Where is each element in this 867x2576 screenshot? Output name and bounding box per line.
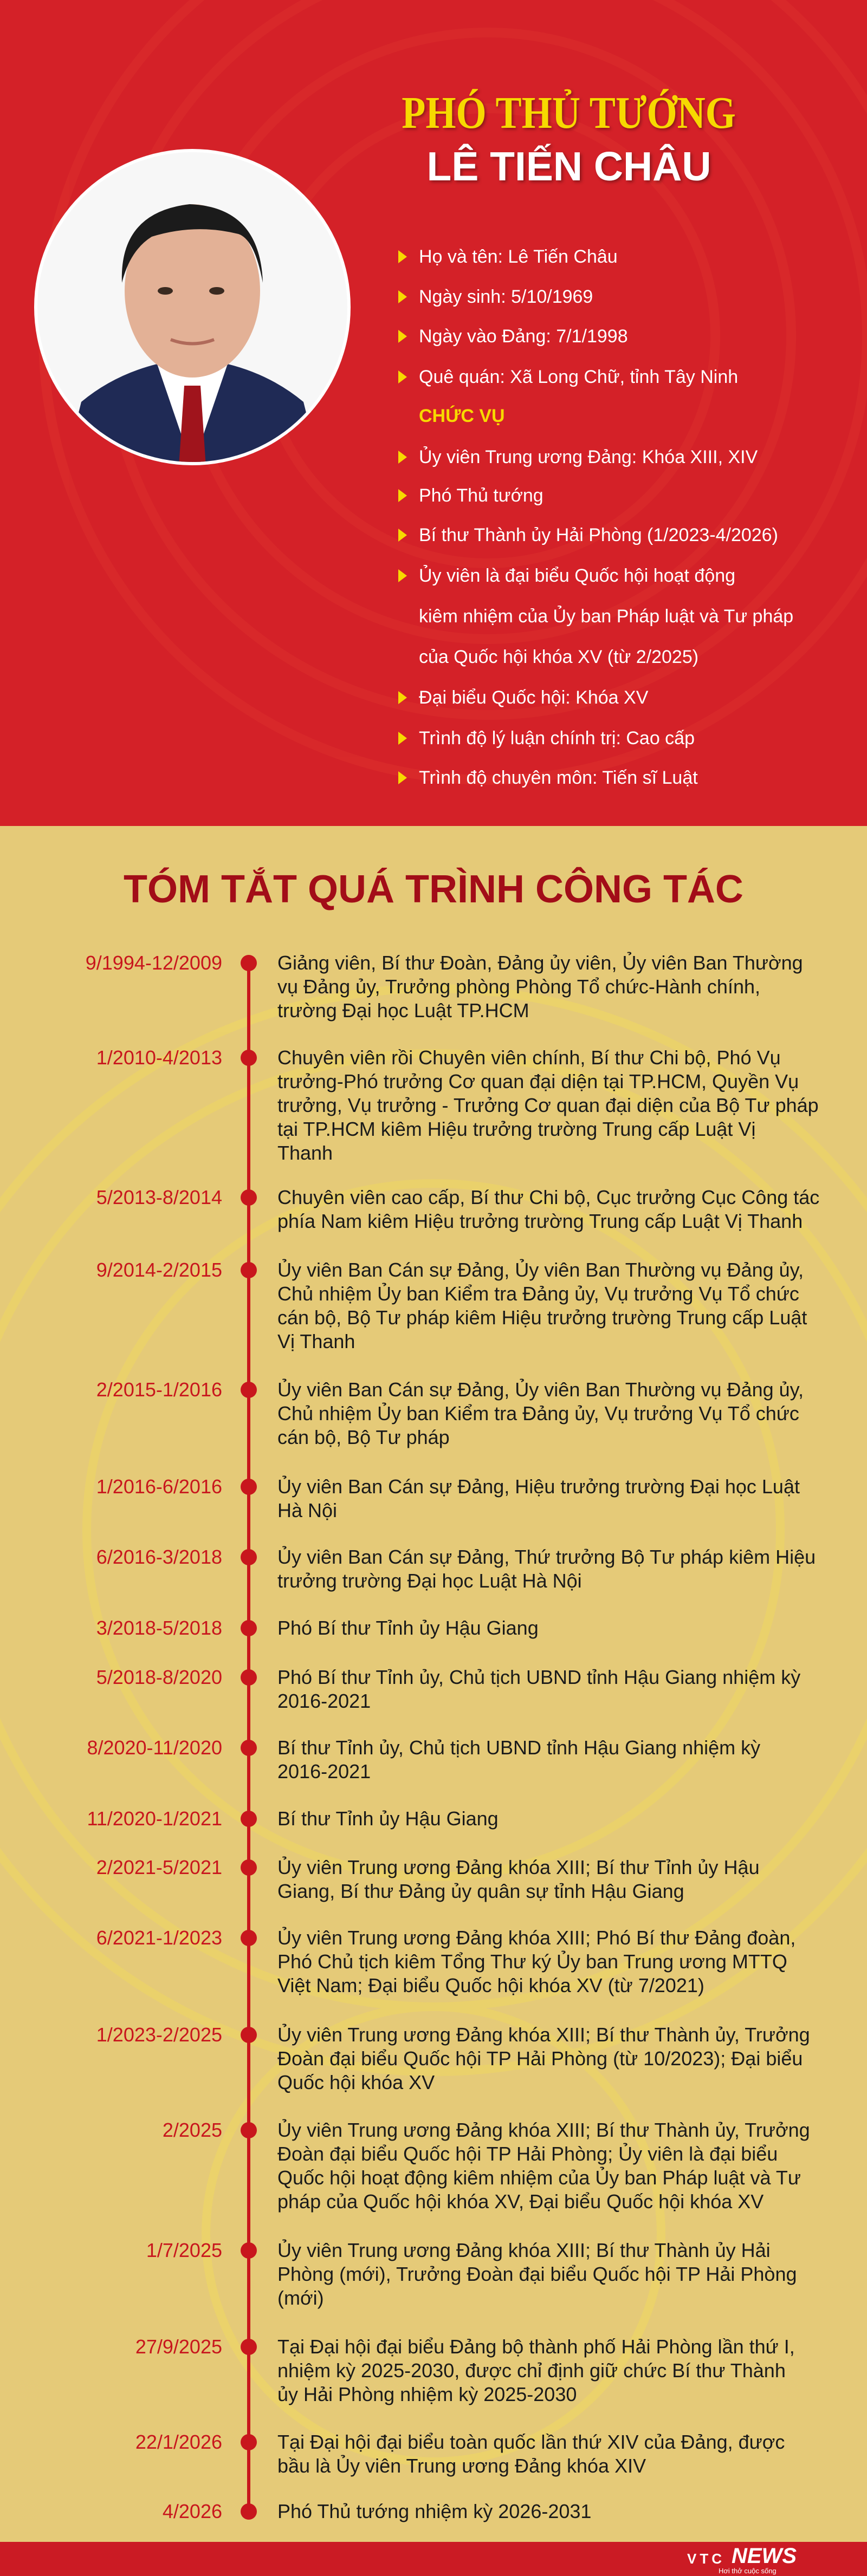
entry 14: Quốc hội khóa XV <box>277 2071 435 2093</box>
header panel: Họ và tên: Lê Tiến Châu <box>419 246 618 267</box>
entry 8: Phó Bí thư Tỉnh ủy Hậu Giang <box>277 1617 539 1639</box>
header panel: Ngày sinh: 5/10/1969 <box>419 287 593 307</box>
info: birthday <box>398 287 593 307</box>
entry 3: Chuyên viên cao cấp, Bí thư Chi bộ, Cục trưởng Cục Công tác <box>277 1186 819 1208</box>
entry 7: Ủy viên Ban Cán sự Đảng, Thứ trưởng Bộ Tư pháp kiêm Hiệu <box>277 1546 816 1568</box>
entry 2: trưởng, Vụ trưởng - Trưởng Cơ quan đại diện của Bộ Tư pháp <box>277 1094 819 1116</box>
title: position: PHÓ THỦ TƯỚNG <box>402 88 736 138</box>
header panel: Trình độ lý luận chính trị: Cao cấp <box>419 728 695 749</box>
entry 13: Ủy viên Trung ương Đảng khóa XIII; Phó Bí thư Đảng đoàn, <box>277 1927 795 1949</box>
entry 4: cán bộ, Bộ Tư pháp kiêm Hiệu trưởng trường Trung cấp Luật <box>277 1306 807 1329</box>
entry 18: 22/1/2026 <box>135 2431 222 2453</box>
entry 14: Ủy viên Trung ương Đảng khóa XIII; Bí thư Thành ủy, Trưởng <box>277 2024 810 2046</box>
entry 18: bầu là Ủy viên Trung ương Đảng khóa XIV <box>277 2455 646 2477</box>
entry 6: Ủy viên Ban Cán sự Đảng, Hiệu trưởng trường Đại học Luật <box>277 1475 800 1498</box>
entry 9 <box>96 1666 801 1712</box>
header panel: Quê quán: Xã Long Chữ, tỉnh Tây Ninh <box>419 367 738 387</box>
entry 5: Ủy viên Ban Cán sự Đảng, Ủy viên Ban Thường vụ Đảng ủy, <box>277 1378 804 1401</box>
info: deputy PM <box>398 485 544 506</box>
entry 12 <box>96 1856 760 1902</box>
portrait photo <box>34 149 351 465</box>
entry 15 <box>163 2119 810 2213</box>
entry 10: 2016-2021 <box>277 1760 371 1783</box>
entry 14 <box>96 2024 810 2093</box>
entry 7: 6/2016-3/2018 <box>96 1546 222 1568</box>
header panel: Ủy viên Trung ương Đảng: Khóa XIII, XIV <box>419 447 758 467</box>
title: name: LÊ TIẾN CHÂU <box>427 144 711 189</box>
entry 7: trưởng trường Đại học Luật Hà Nội <box>277 1570 582 1592</box>
logo: VTC NEWS: Hơi thở cuộc sống <box>719 2567 777 2575</box>
info: political theory <box>398 728 695 749</box>
entry 18 <box>135 2431 785 2477</box>
header panel <box>0 0 867 826</box>
entry 3 <box>96 1186 819 1232</box>
info: NA committee <box>398 565 793 667</box>
entry 15: pháp của Quốc hội khóa XV, Đại biểu Quốc hội khóa XV <box>277 2190 764 2213</box>
entry 4: 9/2014-2/2015 <box>96 1259 222 1281</box>
entry 10: 8/2020-11/2020 <box>87 1736 222 1759</box>
info: central committee <box>398 446 758 467</box>
entry 16 <box>146 2239 797 2309</box>
entry 3: 5/2013-8/2014 <box>96 1186 222 1208</box>
background pattern yellow <box>0 984 867 2466</box>
entry 4: Ủy viên Ban Cán sự Đảng, Ủy viên Ban Thường vụ Đảng ủy, <box>277 1259 804 1281</box>
entry 2: tại TP.HCM kiêm Hiệu trưởng trường Trung cấp Luật Vị <box>277 1118 755 1140</box>
entry 15: Ủy viên Trung ương Đảng khóa XIII; Bí thư Thành ủy, Trưởng <box>277 2119 810 2141</box>
entry 5 <box>96 1378 804 1448</box>
entry 17: nhiệm kỳ 2025-2030, được chỉ định giữ chức Bí thư Thành <box>277 2359 786 2382</box>
logo: VTC NEWS: VTC <box>687 2551 725 2567</box>
entry 13: Phó Chủ tịch kiêm Tổng Thư ký Ủy ban Trung ương MTTQ <box>277 1950 787 1973</box>
entry 15: Quốc hội hoạt động kiêm nhiệm của Ủy ban Pháp luật và Tư <box>277 2167 801 2189</box>
footer <box>0 2542 867 2576</box>
entry 4: Chủ nhiệm Ủy ban Kiểm tra Đảng ủy, Vụ trưởng Vụ Tổ chức <box>277 1283 799 1305</box>
entry 2: trưởng-Phó trưởng Cơ quan đại diện tại TP.HCM, Quyền Vụ <box>277 1070 799 1092</box>
entry 3: phía Nam kiêm Hiệu trưởng trường Trung cấp Luật Vị Thanh <box>277 1210 803 1232</box>
entry 10 <box>87 1736 760 1783</box>
entry 4 <box>96 1259 807 1352</box>
entry 4: Vị Thanh <box>277 1330 355 1352</box>
entry 1: vụ Đảng ủy, Trưởng phòng Phòng Tổ chức-Hành chính, <box>277 975 760 998</box>
entry 2: 1/2010-4/2013 <box>96 1046 222 1069</box>
entry 16: Ủy viên Trung ương Đảng khóa XIII; Bí thư Thành ủy Hải <box>277 2239 771 2261</box>
background pattern <box>0 0 867 826</box>
entry 12: 2/2021-5/2021 <box>96 1856 222 1878</box>
logo: VTC NEWS <box>687 2544 797 2575</box>
info: education <box>398 767 698 788</box>
heading: positions: CHỨC VỤ <box>419 406 505 426</box>
entry 8 <box>96 1617 539 1639</box>
info: NA deputy <box>398 687 648 708</box>
entry 14: Đoàn đại biểu Quốc hội TP Hải Phòng (từ 10/2023); Đại biểu <box>277 2047 803 2070</box>
entry 13: Việt Nam; Đại biểu Quốc hội khóa XV (từ 7/2021) <box>277 1974 704 1996</box>
entry 13 <box>96 1927 795 1996</box>
entry 2: Thanh <box>277 1142 333 1164</box>
entry 6 <box>96 1475 800 1521</box>
entry 19: 4/2026 <box>163 2500 222 2522</box>
entry 5: 2/2015-1/2016 <box>96 1378 222 1401</box>
header panel: kiêm nhiệm của Ủy ban Pháp luật và Tư pháp <box>419 606 793 627</box>
header panel: Đại biểu Quốc hội: Khóa XV <box>419 687 648 708</box>
entry 6: 1/2016-6/2016 <box>96 1475 222 1498</box>
entry 16: 1/7/2025 <box>146 2239 222 2261</box>
entry 15: Đoàn đại biểu Quốc hội TP Hải Phòng; Ủy viên là đại biểu <box>277 2143 778 2165</box>
header panel: Bí thư Thành ủy Hải Phòng (1/2023-4/2026) <box>419 525 778 545</box>
entry 12: Giang, Bí thư Đảng ủy quân sự tỉnh Hậu Giang <box>277 1880 684 1902</box>
entry 11: Bí thư Tỉnh ủy Hậu Giang <box>277 1807 499 1830</box>
entry 18: Tại Đại hội đại biểu toàn quốc lần thứ XIV của Đảng, được <box>277 2431 785 2453</box>
entry 2 <box>96 1046 819 1164</box>
entry 5: Chủ nhiệm Ủy ban Kiểm tra Đảng ủy, Vụ trưởng Vụ Tổ chức <box>277 1402 799 1424</box>
header panel: của Quốc hội khóa XV (từ 2/2025) <box>419 647 698 667</box>
entry 9: 5/2018-8/2020 <box>96 1666 222 1688</box>
entry 1: trường Đại học Luật TP.HCM <box>277 999 529 1022</box>
timeline title: TÓM TẮT QUÁ TRÌNH CÔNG TÁC <box>124 868 743 911</box>
header panel: Phó Thủ tướng <box>419 485 544 506</box>
info: Hai Phong secretary <box>398 525 778 545</box>
entry 15: 2/2025 <box>163 2119 222 2141</box>
timeline <box>247 971 250 2503</box>
entry 7 <box>96 1546 816 1592</box>
entry 12: Ủy viên Trung ương Đảng khóa XIII; Bí thư Tỉnh ủy Hậu <box>277 1856 760 1878</box>
header panel: Ngày vào Đảng: 7/1/1998 <box>419 326 628 347</box>
entry 5: cán bộ, Bộ Tư pháp <box>277 1426 450 1448</box>
timeline line <box>247 963 250 2512</box>
entry 13: 6/2021-1/2023 <box>96 1927 222 1949</box>
entry 16: Phòng (mới), Trưởng Đoàn đại biểu Quốc hội TP Hải Phòng <box>277 2263 797 2285</box>
info: party date <box>398 326 628 347</box>
entry 2: Chuyên viên rồi Chuyên viên chính, Bí thư Chi bộ, Phó Vụ <box>277 1046 781 1069</box>
header panel: Trình độ chuyên môn: Tiến sĩ Luật <box>419 767 698 788</box>
entry 9: Phó Bí thư Tỉnh ủy, Chủ tịch UBND tỉnh Hậu Giang nhiệm kỳ <box>277 1666 800 1688</box>
entry 10: Bí thư Tỉnh ủy, Chủ tịch UBND tỉnh Hậu Giang nhiệm kỳ <box>277 1736 760 1759</box>
entry 1 <box>86 952 803 1022</box>
entry 11 <box>87 1807 499 1830</box>
entry 17: Tại Đại hội đại biểu Đảng bộ thành phố Hải Phòng lần thứ I, <box>277 2336 795 2358</box>
entry 8: 3/2018-5/2018 <box>96 1617 222 1639</box>
entry 1: Giảng viên, Bí thư Đoàn, Đảng ủy viên, Ủy viên Ban Thường <box>277 952 803 974</box>
entry 6: Hà Nội <box>277 1499 337 1521</box>
info: name <box>398 246 618 267</box>
entry 16: (mới) <box>277 2287 324 2309</box>
logo: VTC NEWS: NEWS <box>732 2544 797 2568</box>
entry 19: Phó Thủ tướng nhiệm kỳ 2026-2031 <box>277 2500 591 2522</box>
entry 9: 2016-2021 <box>277 1690 371 1712</box>
entry 11: 11/2020-1/2021 <box>87 1807 222 1830</box>
entry 17 <box>135 2336 795 2405</box>
entry 17: 27/9/2025 <box>135 2336 222 2358</box>
header panel: Ủy viên là đại biểu Quốc hội hoạt động <box>419 565 735 586</box>
entry 1: 9/1994-12/2009 <box>86 952 222 974</box>
info: hometown <box>398 367 738 387</box>
entry 17: ủy Hải Phòng nhiệm kỳ 2025-2030 <box>277 2383 577 2405</box>
entry 14: 1/2023-2/2025 <box>96 2024 222 2046</box>
